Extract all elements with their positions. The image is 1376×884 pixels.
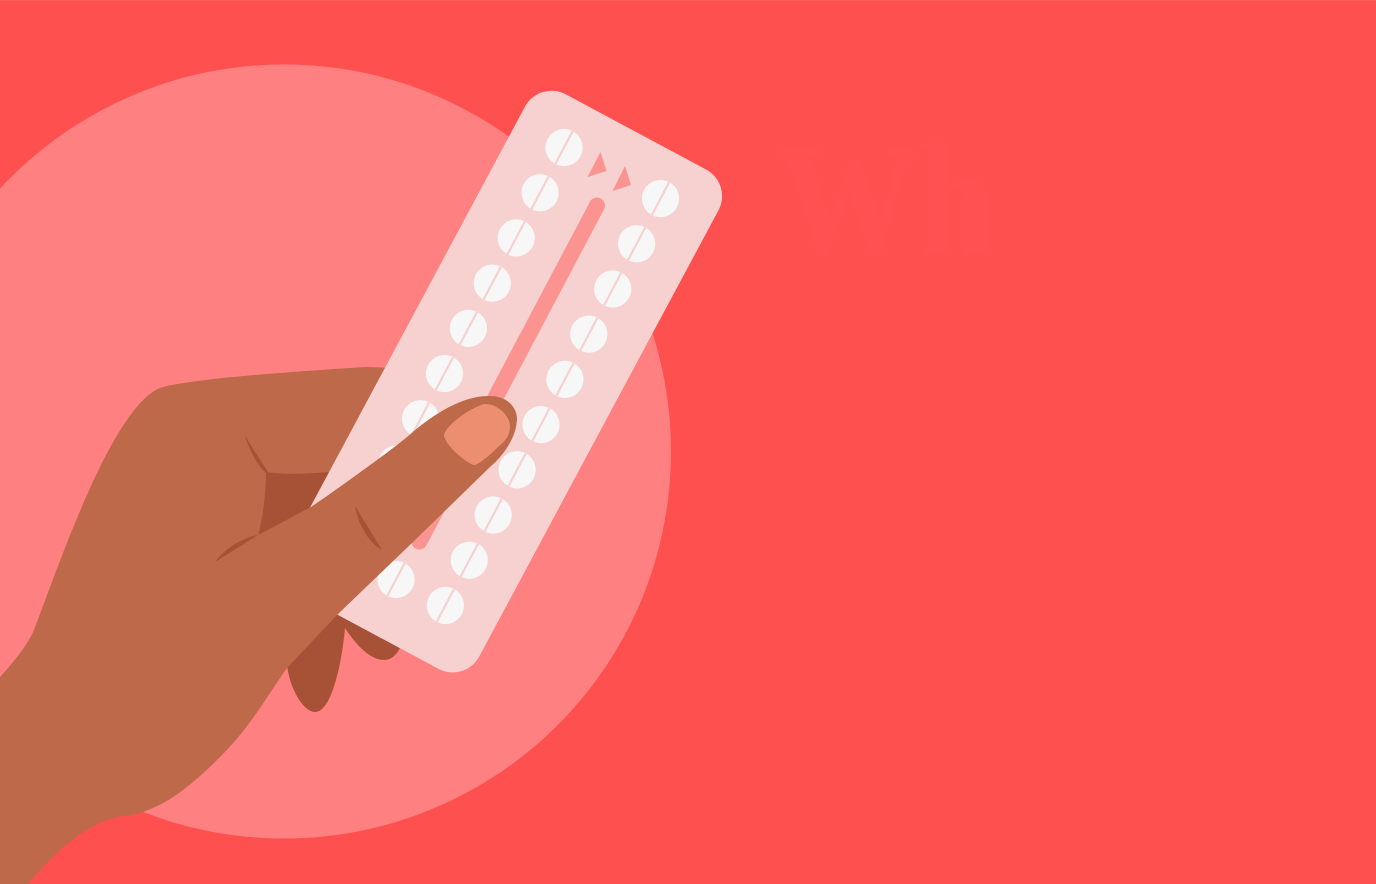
left pill column [372, 122, 589, 489]
thumb and forearm [0, 396, 517, 884]
centre slot [409, 195, 608, 552]
thumb knuckle crease [355, 506, 382, 550]
palm crease [245, 436, 268, 473]
palm [0, 367, 400, 884]
pills and slot [324, 122, 686, 631]
web crease [215, 535, 258, 562]
hidden fingers behind the pack [287, 600, 400, 712]
faint ghost heading: Wh [778, 111, 995, 289]
direction arrows on pack [588, 152, 631, 191]
thumb nail [444, 404, 510, 465]
right pill column [420, 173, 686, 631]
pack card [272, 80, 733, 683]
background circle [0, 64, 671, 838]
palm shadow [258, 471, 340, 537]
middle bottom pill [371, 554, 421, 605]
